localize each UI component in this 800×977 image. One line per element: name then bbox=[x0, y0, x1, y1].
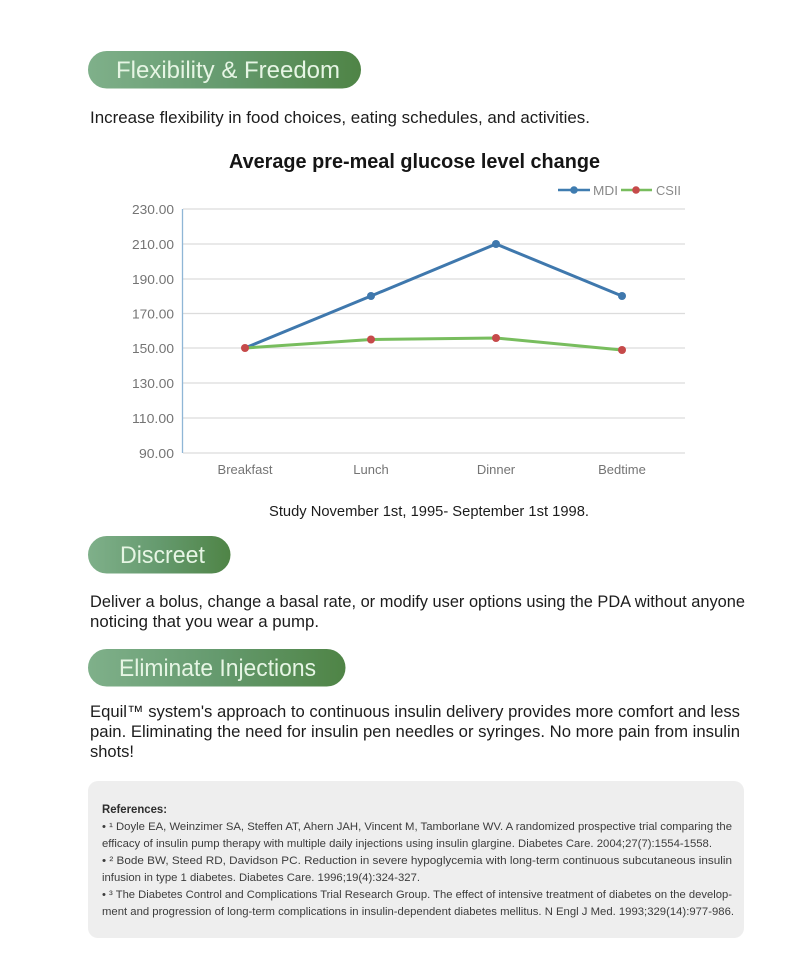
reference list: ment and progression of long-term complications in insulin-dependent diabetes mellitus. N Engl J Med. 1993;329(14):977-986. bbox=[102, 906, 734, 918]
x axis labels bbox=[218, 462, 646, 477]
chart title: Average pre-meal glucose level change bbox=[229, 151, 600, 173]
series: MDI bbox=[245, 240, 626, 348]
y axis labels: 90.00 bbox=[139, 446, 174, 461]
chart legend: CSII bbox=[656, 184, 681, 198]
heading: Eliminate Injections: Eliminate Injections bbox=[119, 655, 316, 682]
reference list: • ² Bode BW, Steed RD, Davidson PC. Reduction in severe hypoglycemia with long-term continuous subcutaneous insulin bbox=[102, 855, 732, 867]
text: eliminate injections description bbox=[90, 703, 740, 761]
reference list: • ¹ Doyle EA, Weinzimer SA, Steffen AT, Ahern JAH, Vincent M, Tamborlane WV. A randomized prospective trial comparing the bbox=[102, 821, 732, 833]
x axis labels: Dinner bbox=[477, 462, 516, 477]
panel: references bbox=[88, 781, 744, 938]
line chart: glucose by meal bbox=[132, 184, 685, 477]
reference list: infusion in type 1 diabetes. Diabetes Care. 1996;19(4):324-327. bbox=[102, 872, 420, 884]
y axis labels: 190.00 bbox=[132, 272, 174, 287]
text: eliminate injections description: Equil™ system's approach to continuous insulin delivery provides more comfort and less bbox=[90, 703, 740, 721]
text: eliminate injections description: shots! bbox=[90, 743, 134, 761]
heading: Discreet bbox=[88, 536, 230, 574]
heading: Eliminate Injections bbox=[88, 649, 346, 686]
heading: Discreet: Discreet bbox=[120, 542, 205, 569]
x axis labels: Breakfast bbox=[218, 462, 273, 477]
x axis labels: Lunch bbox=[353, 462, 389, 477]
text: discreet description: Deliver a bolus, change a basal rate, or modify user options using the PDA without anyone bbox=[90, 593, 745, 611]
text: eliminate injections description: pain. Eliminating the need for insulin pen needles or syringes. No more pain from insulin bbox=[90, 723, 740, 741]
y axis labels bbox=[132, 202, 174, 461]
heading: Flexibility & Freedom bbox=[88, 51, 361, 88]
text: flexibility intro: Increase flexibility in food choices, eating schedules, and activities. bbox=[90, 109, 590, 127]
series: CSII bbox=[241, 334, 626, 354]
heading: Flexibility & Freedom: Flexibility & Freedom bbox=[116, 57, 340, 84]
y axis labels: 230.00 bbox=[132, 202, 174, 217]
text: discreet description bbox=[90, 593, 745, 631]
text: discreet description: noticing that you wear a pump. bbox=[90, 613, 319, 631]
y axis labels: 130.00 bbox=[132, 376, 174, 391]
reference list bbox=[102, 821, 734, 918]
reference list: efficacy of insulin pump therapy with multiple daily injections using insulin glargine. Diabetes Care. 2004;27(7):1554-1558. bbox=[102, 838, 712, 850]
chart legend: MDI bbox=[593, 184, 618, 198]
chart caption: study dates: Study November 1st, 1995- September 1st 1998. bbox=[269, 504, 589, 520]
y axis labels: 150.00 bbox=[132, 341, 174, 356]
references heading: References: bbox=[102, 804, 167, 816]
y axis labels: 110.00 bbox=[132, 411, 174, 426]
y axis labels: 210.00 bbox=[132, 237, 174, 252]
reference list: • ³ The Diabetes Control and Complications Trial Research Group. The effect of intensive treatment of diabetes on the develop- bbox=[102, 889, 732, 901]
chart legend bbox=[558, 184, 681, 198]
y axis labels: 170.00 bbox=[132, 306, 174, 322]
x axis labels: Bedtime bbox=[598, 462, 646, 477]
